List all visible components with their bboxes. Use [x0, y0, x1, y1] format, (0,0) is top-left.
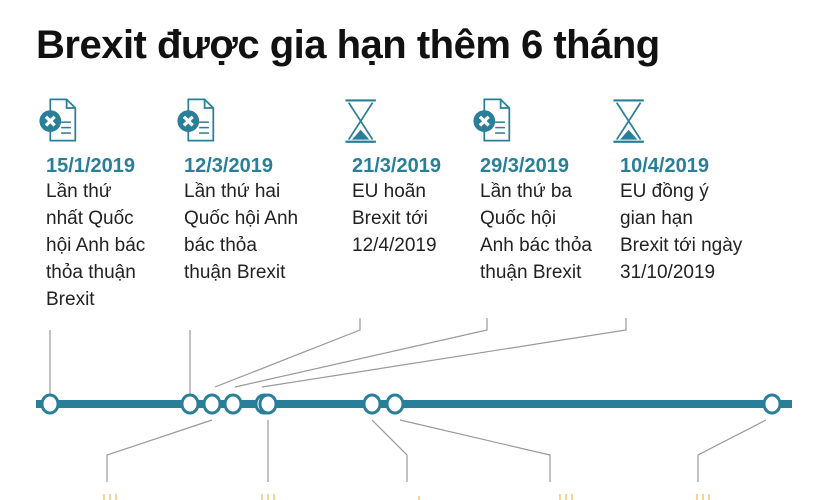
event 1	[39, 98, 145, 310]
event 2: bác thỏa	[184, 235, 257, 256]
event 3	[345, 99, 441, 256]
event 5: Brexit tới ngày	[620, 235, 742, 256]
event 3: EU hoãn	[352, 181, 426, 202]
event 4: thuận Brexit	[480, 262, 581, 283]
title: Brexit được gia hạn thêm 6 tháng	[36, 23, 660, 67]
icon: rejected document	[39, 98, 76, 142]
icon: rejected document	[177, 98, 214, 142]
event 5: EU đồng ý	[620, 181, 709, 202]
event 5: gian hạn	[620, 208, 693, 229]
event 3: 21/3/2019	[352, 155, 441, 177]
event 2: thuận Brexit	[184, 262, 285, 283]
event 2	[177, 98, 298, 283]
event 5	[613, 99, 742, 283]
event 3: Brexit tới	[352, 208, 428, 229]
event 2: Lần thứ hai	[184, 181, 280, 202]
event 5: 31/10/2019	[620, 262, 715, 283]
event 1: 15/1/2019	[46, 155, 135, 177]
event 5: 10/4/2019	[620, 155, 709, 177]
event 2: 12/3/2019	[184, 155, 273, 177]
icon: hourglass	[345, 99, 376, 143]
event 2: Quốc hội Anh	[184, 208, 298, 229]
icon: rejected document	[473, 98, 510, 142]
event 1: Brexit	[46, 289, 95, 310]
event 1: nhất Quốc	[46, 208, 134, 229]
event 4: Lần thứ ba	[480, 181, 572, 202]
event 4: Anh bác thỏa	[480, 235, 592, 256]
event 4: Quốc hội	[480, 208, 556, 229]
event 4: 29/3/2019	[480, 155, 569, 177]
event 1: thỏa thuận	[46, 262, 136, 283]
event 4	[473, 98, 592, 283]
event 1: Lần thứ	[46, 181, 112, 202]
event 3: 12/4/2019	[352, 235, 437, 256]
icon: hourglass	[613, 99, 644, 143]
event 1: hội Anh bác	[46, 235, 145, 256]
